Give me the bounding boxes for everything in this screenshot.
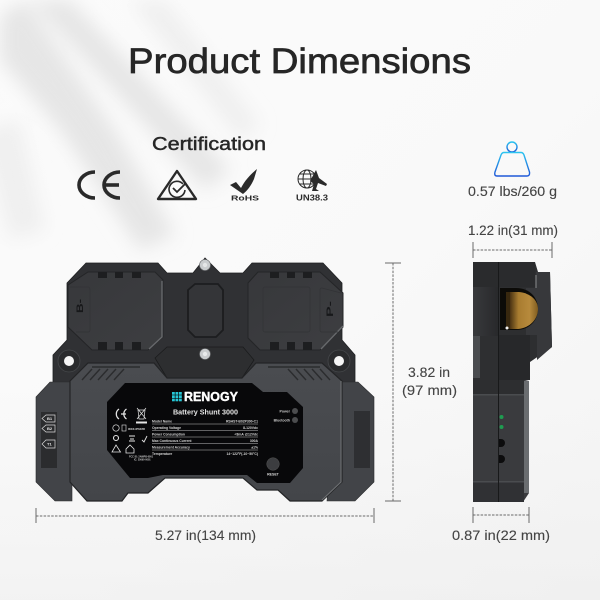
front view of device [36, 258, 374, 501]
mounting hole: right [328, 350, 350, 372]
icon: UN38.3 [296, 170, 329, 202]
black label: FCC ID: 2AWPB-0001 [129, 456, 154, 458]
thickness label: 0.87 in(22 mm) [452, 527, 550, 543]
depth label: 1.22 in(31 mm) [468, 222, 558, 238]
height label: 3.82 in [408, 364, 450, 380]
left side block: B1 [47, 416, 53, 421]
thickness dimension line [473, 507, 529, 523]
lower center recess [155, 347, 254, 378]
left terminal cover: B- [75, 299, 85, 313]
spec table: 300A [250, 439, 259, 443]
mounting hole: left [58, 350, 80, 372]
reset button: RESET [267, 472, 280, 476]
spec table: Power Consumption [152, 432, 185, 436]
product name: Battery Shunt 3000 [173, 408, 238, 416]
vent chevrons: right [268, 367, 330, 380]
right terminal cover [248, 272, 343, 350]
side body upper [473, 262, 552, 380]
terminal tags [42, 415, 55, 448]
width label: 5.27 in(134 mm) [155, 527, 256, 543]
height label [402, 364, 457, 398]
icon: RoHS [230, 169, 259, 202]
black label [107, 383, 303, 483]
right side block [327, 382, 374, 501]
top screw [200, 260, 210, 270]
side view of device [473, 262, 552, 502]
center octagon recess [188, 284, 223, 337]
spec table [152, 420, 259, 456]
spec table: Max Continuous Current [152, 439, 192, 443]
ports [499, 439, 505, 463]
height label: (97 mm) [402, 382, 457, 398]
main body plate [70, 363, 342, 501]
depth dimension line [473, 242, 552, 258]
vent chevrons: left [82, 367, 140, 380]
height dimension line [385, 263, 401, 501]
icon: CE mark [79, 172, 120, 198]
label compliance marks [112, 408, 147, 453]
spec table: 8-120Vdc [243, 426, 258, 430]
spec table: <8mA @12Vdc [235, 432, 258, 436]
width dimension line [36, 508, 374, 523]
spec table: Temperature [152, 452, 172, 456]
title: Product Dimensions [128, 42, 471, 81]
left terminal cover [68, 272, 163, 350]
power indicator: Power [279, 410, 291, 414]
brand logo: RENOGY [184, 390, 239, 404]
brass terminal [500, 288, 538, 330]
reset button [267, 458, 280, 476]
icon: RoHS: RoHS [231, 194, 259, 202]
bottom screw [200, 348, 210, 360]
left side block [36, 382, 72, 501]
spec table: 14~122°F(-10~50°C) [226, 452, 258, 456]
weight label: 0.57 lbs/260 g [468, 183, 557, 199]
black label: IDXX-IP64/65 [128, 427, 146, 431]
left side block: B2 [47, 426, 53, 431]
spec table: RSHST-B02P300-C1 [226, 420, 258, 424]
status LEDs [500, 415, 504, 429]
bluetooth indicator [274, 417, 298, 423]
spec table: Model Name [152, 420, 172, 424]
spec table: ±1% [251, 446, 258, 450]
power indicator [279, 408, 298, 414]
icon: weight [495, 142, 530, 176]
right terminal cover: P- [325, 301, 335, 317]
certification heading: Certification [152, 134, 266, 154]
side body lower [473, 380, 529, 502]
icon: UN38.3: UN38.3 [296, 194, 329, 202]
spec table: Measurement Accuracy [152, 446, 190, 450]
center seam [498, 262, 500, 502]
spec table: Operating Voltage [152, 426, 181, 430]
left side block: T1 [47, 442, 52, 446]
bluetooth indicator: Bluetooth [274, 418, 290, 422]
icon: RCM triangle [158, 171, 196, 199]
black label: IC: 25690-0001 [134, 458, 151, 462]
upper housing [53, 258, 355, 384]
